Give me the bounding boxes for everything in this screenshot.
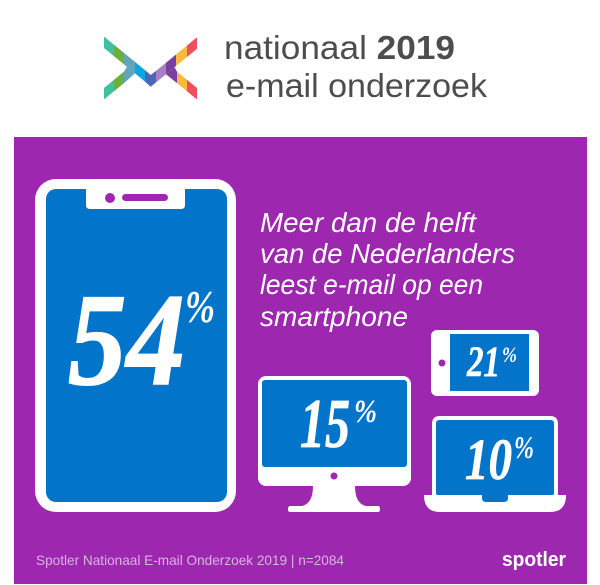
icon: laptop with 10% — [424, 416, 566, 512]
stat sign: 15 percent: % — [354, 394, 377, 430]
panel: purple background — [14, 137, 587, 584]
icon: smartphone with 54% — [35, 179, 236, 512]
stat sign: 54 percent: % — [185, 282, 215, 332]
stat sign: 10 percent: % — [514, 429, 534, 465]
title: e-mail onderzoek — [226, 67, 488, 104]
stat: 15 percent: 15 — [300, 386, 350, 463]
icon: tablet with 21% — [431, 330, 539, 396]
headline: leest e-mail op een — [260, 269, 483, 300]
headline: van de Nederlanders — [260, 238, 515, 269]
stat: 54 percent: 54 — [68, 266, 185, 413]
stat sign: 21 percent: % — [502, 342, 517, 367]
headline: smartphone — [260, 301, 408, 332]
brand logo: spotler: spotler — [502, 549, 566, 571]
stat: 10 percent: 10 — [465, 427, 512, 492]
title: nationaal 2019 — [224, 29, 455, 66]
title — [224, 29, 488, 104]
headline — [260, 207, 515, 332]
logo: envelope made of coloured bands — [104, 36, 197, 100]
headline: Meer dan de helft — [260, 207, 477, 238]
footer source: Spotler Nationaal E-mail Onderzoek 2019 | n=2084 — [36, 552, 344, 568]
icon: desktop monitor with 15% — [258, 376, 411, 512]
stat: 21 percent: 21 — [466, 339, 500, 386]
